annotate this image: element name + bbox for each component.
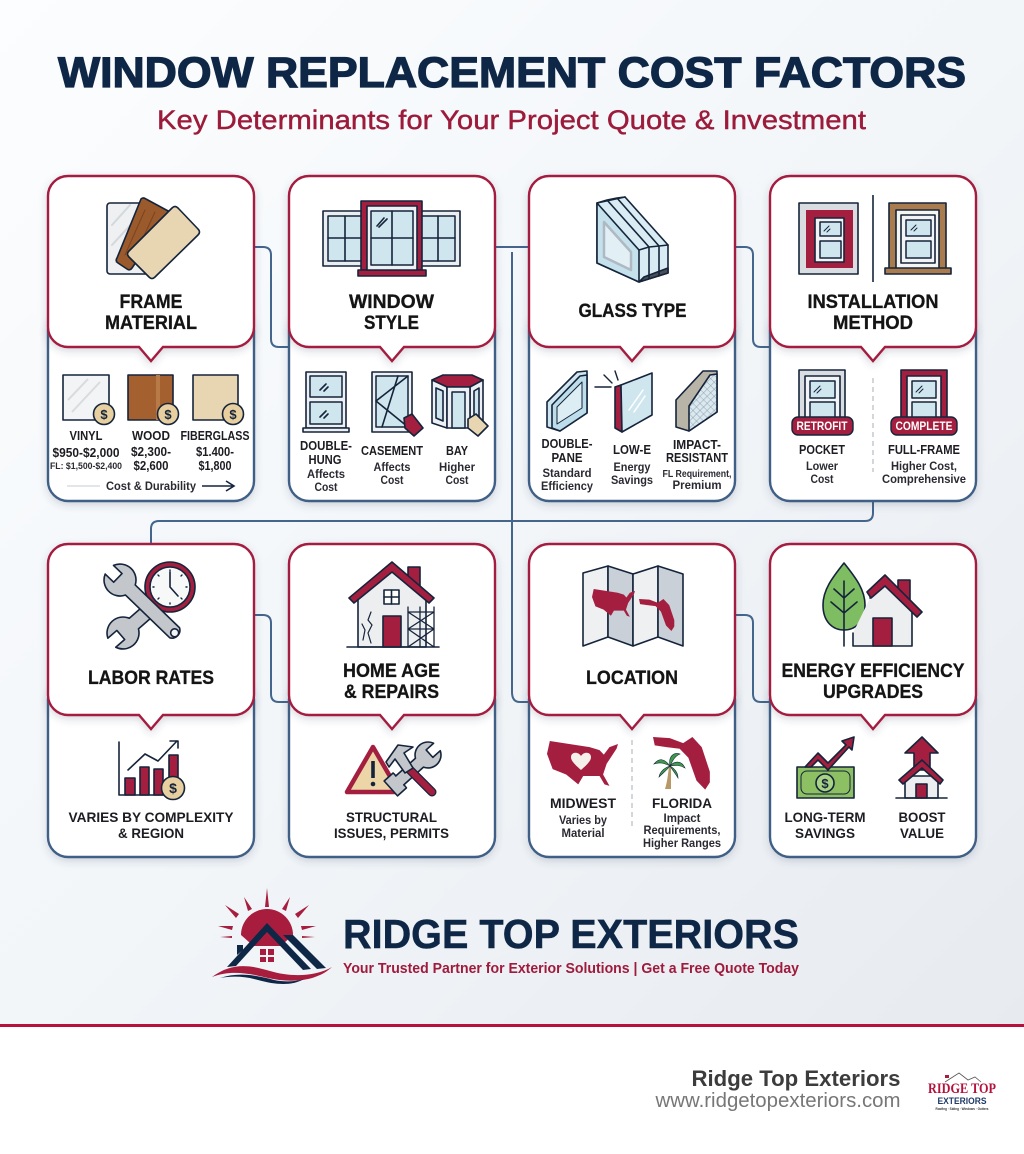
footer small logo	[928, 1073, 996, 1111]
badge: retrofit: RETROFIT	[796, 419, 848, 433]
bay label: Cost	[446, 475, 469, 487]
casement label: Cost	[380, 475, 404, 487]
fiberglass swatch: $	[229, 407, 237, 422]
connector lines	[151, 247, 873, 702]
badge: complete: COMPLETE	[896, 419, 952, 433]
midwest label	[550, 795, 616, 840]
casement label	[361, 444, 423, 487]
casement label: CASEMENT	[361, 444, 423, 458]
icon: midwest map	[547, 741, 618, 786]
florida label	[643, 795, 721, 850]
logo mark	[212, 888, 332, 984]
wood price: WOOD	[132, 429, 170, 443]
panel: energy efficiency upgrades	[770, 544, 976, 857]
bay label	[439, 444, 476, 487]
florida label: FLORIDA	[652, 795, 712, 811]
double-hung label: Affects	[307, 469, 345, 481]
footer website: www.ridgetopexteriors.com	[654, 1090, 900, 1112]
impact resistant label	[662, 438, 732, 492]
icon: warning triangle	[347, 747, 399, 792]
icon: wrench back	[101, 596, 162, 655]
savings label: SAVINGS	[795, 825, 855, 841]
fiberglass price: FIBERGLASS	[180, 429, 250, 443]
panel: window style: STYLE	[364, 313, 419, 334]
panel: location	[529, 544, 735, 857]
icon: material swatches	[107, 198, 200, 278]
panel: frame material	[48, 176, 254, 501]
icon: money with arrow	[797, 737, 854, 798]
full-frame label: FULL-FRAME	[888, 443, 960, 457]
logo tagline: Your Trusted Partner for Exterior Solutions | Get a Free Quote Today	[343, 960, 800, 977]
badge: complete	[891, 417, 957, 435]
footer small logo: Roofing · Siding · Windows · Gutters	[936, 1106, 989, 1111]
subtitle: Key Determinants for Your Project Quote & Investment	[157, 105, 867, 135]
vinyl price: FL: $1,500-$2,400	[50, 461, 122, 472]
heading: GLASS TYPE	[578, 301, 686, 322]
full-frame label	[882, 443, 966, 486]
icon: folded map	[583, 566, 683, 646]
panel: installation method	[770, 176, 976, 501]
labor caption: VARIES BY COMPLEXITY	[68, 809, 234, 825]
florida label: Higher Ranges	[643, 838, 721, 850]
fiberglass price: $1,800	[198, 459, 232, 473]
icon: full-frame window	[885, 203, 951, 274]
logo wordmark: RIDGE TOP EXTERIORS	[343, 911, 799, 957]
icon: clock	[145, 562, 195, 612]
vinyl price	[50, 429, 122, 472]
boost value label: BOOST	[898, 809, 946, 825]
double pane label: Efficiency	[541, 481, 594, 493]
heading: INSTALLATION	[808, 292, 938, 313]
wood swatch: $	[164, 407, 172, 422]
heading: LABOR RATES	[88, 668, 214, 689]
wood price: $2,300-	[131, 445, 171, 459]
panel: home age and repairs: & REPAIRS	[344, 682, 439, 703]
dashed divider	[872, 378, 874, 472]
vinyl price: VINYL	[70, 429, 103, 443]
icon: low-e pane	[595, 371, 652, 432]
icon: double-hung	[303, 372, 349, 432]
cost and durability arrow	[67, 481, 234, 493]
icon: double pane	[547, 371, 587, 431]
impact resistant label: FL Requirement,	[662, 469, 732, 480]
midwest label: Material	[562, 828, 604, 840]
dashed divider	[631, 740, 633, 828]
double-hung label: HUNG	[308, 453, 342, 467]
labor caption	[68, 809, 234, 841]
double-hung label: DOUBLE-	[300, 439, 352, 453]
full-frame label: Comprehensive	[882, 474, 966, 486]
icon: rising cost bar chart: $	[169, 780, 177, 796]
impact resistant label: Premium	[672, 480, 722, 492]
wood swatch	[128, 375, 178, 424]
icon: house with arrow	[896, 737, 947, 798]
double-hung label	[300, 439, 352, 494]
double pane label: Standard	[542, 468, 592, 480]
panel: home age and repairs	[289, 544, 495, 857]
florida label: Requirements,	[644, 825, 720, 837]
double pane label: PANE	[552, 451, 582, 465]
panel: labor rates	[48, 544, 254, 857]
heading: LOCATION	[586, 668, 678, 689]
cost and durability arrow: Cost & Durability	[106, 481, 197, 493]
pocket label	[799, 443, 845, 486]
panel: window style	[289, 176, 495, 501]
icon: impact resistant	[676, 371, 717, 431]
low-e label: Energy	[614, 462, 651, 474]
vinyl swatch: $	[100, 407, 108, 422]
fiberglass price: $1.400-	[196, 445, 234, 459]
midwest label: Varies by	[559, 815, 608, 827]
casement label: Affects	[374, 462, 410, 474]
vinyl swatch	[63, 375, 114, 424]
wood price	[131, 429, 171, 473]
footer small logo: EXTERIORS	[938, 1096, 986, 1106]
savings label: LONG-TERM	[784, 809, 866, 825]
double pane label	[541, 437, 594, 493]
icon: florida map with palm	[653, 737, 710, 790]
footer red rule	[0, 1024, 1024, 1027]
boost value label: VALUE	[900, 825, 944, 841]
boost value label	[898, 809, 946, 841]
low-e label: LOW-E	[613, 443, 651, 457]
icon: casement	[372, 372, 423, 436]
icon: old house with scaffold	[347, 562, 439, 647]
pocket label: POCKET	[799, 443, 845, 457]
badge: retrofit	[792, 417, 853, 435]
impact resistant label: IMPACT-	[673, 438, 721, 452]
footer white band	[0, 1027, 1024, 1154]
icon: house	[853, 575, 922, 646]
vinyl price: $950-$2,000	[52, 446, 120, 460]
fiberglass swatch	[193, 375, 244, 424]
low-e label	[611, 443, 653, 487]
icon: rising cost bar chart	[119, 741, 184, 800]
full-frame label: Higher Cost,	[891, 461, 957, 473]
wood price: $2,600	[134, 459, 169, 473]
pocket label: Cost	[810, 474, 834, 486]
panel: installation method: METHOD	[833, 313, 913, 334]
icon: bay window	[432, 375, 488, 436]
icon: retrofit window	[799, 203, 858, 274]
pocket label: Lower	[806, 461, 838, 473]
fiberglass price	[180, 429, 250, 473]
heading: HOME AGE	[343, 661, 440, 682]
labor caption: & REGION	[118, 825, 184, 841]
icon: three-part window	[323, 201, 460, 276]
footer small logo: RIDGE TOP	[928, 1081, 996, 1097]
bay label: BAY	[446, 444, 469, 458]
impact resistant label: RESISTANT	[666, 451, 728, 465]
panel: energy efficiency upgrades: UPGRADES	[823, 682, 923, 703]
panel: frame material: MATERIAL	[105, 313, 197, 334]
bay label: Higher	[439, 462, 476, 474]
midwest label: MIDWEST	[550, 795, 616, 811]
icon: leaf	[823, 563, 865, 646]
panel: glass type	[529, 176, 735, 501]
repairs caption	[334, 809, 449, 841]
heading: ENERGY EFFICIENCY	[782, 661, 965, 682]
low-e label: Savings	[611, 475, 653, 487]
icon: hammer and wrench	[382, 737, 446, 798]
double pane label: DOUBLE-	[542, 437, 592, 451]
repairs caption: ISSUES, PERMITS	[334, 825, 449, 841]
savings label	[784, 809, 866, 841]
heading: WINDOW	[349, 292, 434, 313]
icon: wrench front	[98, 558, 189, 647]
florida label: Impact	[664, 813, 701, 825]
divider	[872, 195, 874, 282]
icon: retrofit pocket	[799, 370, 845, 420]
icon: triple pane glass	[597, 197, 668, 282]
repairs caption: STRUCTURAL	[346, 809, 437, 825]
icon: complete full-frame	[901, 370, 947, 420]
title: WINDOW REPLACEMENT COST FACTORS	[58, 49, 966, 97]
footer company name: Ridge Top Exteriors	[692, 1066, 900, 1091]
double-hung label: Cost	[314, 482, 338, 494]
icon: money with arrow: $	[821, 776, 829, 791]
heading: FRAME	[120, 292, 182, 313]
